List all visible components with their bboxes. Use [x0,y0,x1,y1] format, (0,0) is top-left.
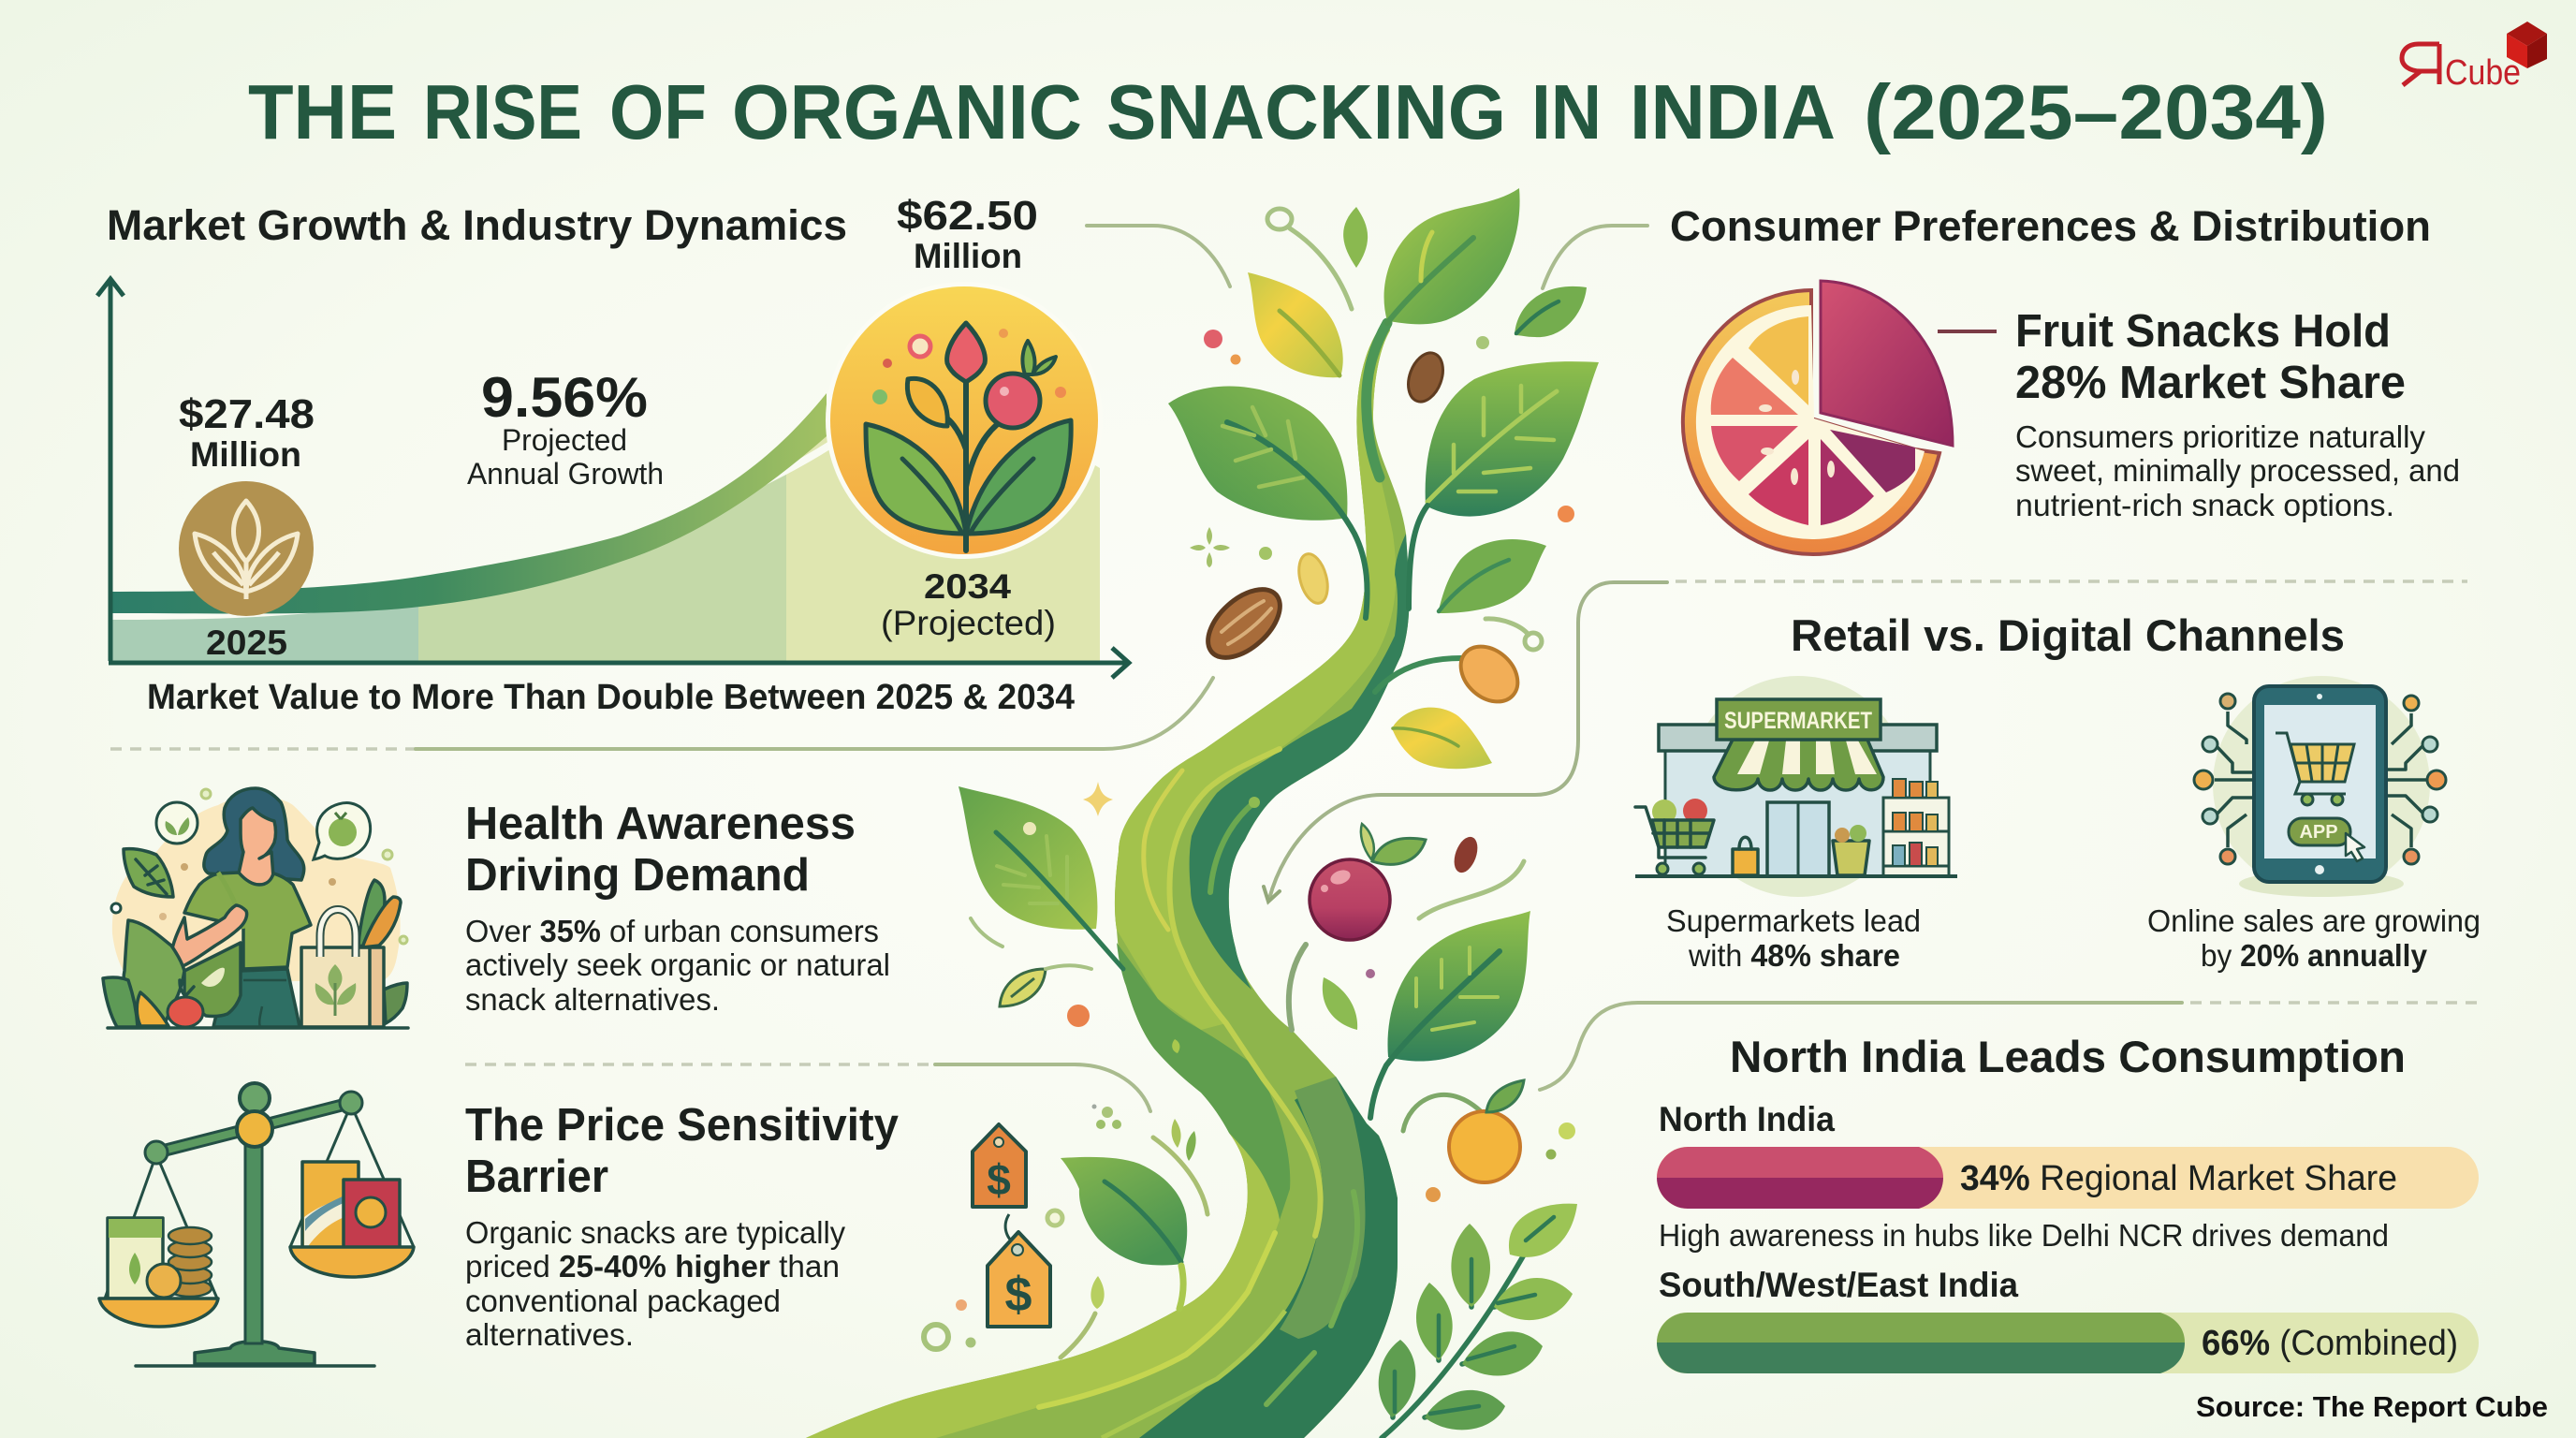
bar: north india 34%: 34% Regional Market Share [1960,1159,2397,1198]
source note: Source: The Report Cube [2196,1390,2548,1423]
text: online sales [2147,903,2481,973]
label: year 2025: 2025 [206,624,287,662]
body: fruit snacks: sweet, minimally processed, and [2015,453,2460,488]
body: price sensitivity: alternatives. [465,1317,634,1352]
text: online sales: Online sales are growing [2147,903,2481,938]
heading: price sensitivity [465,1100,899,1202]
heading: fruit snacks [2015,306,2406,408]
chart caption: Market Value to More Than Double Between 2025 & 2034 [147,678,1075,717]
icon: fruit pie chart [1683,281,1953,554]
title: ORGANIC [732,68,1082,155]
body: fruit snacks: Consumers prioritize naturally [2015,419,2425,454]
body: fruit snacks: nutrient-rich snack options. [2015,488,2394,522]
leaf: yellow lower [1392,708,1492,769]
leaf: small right [1438,539,1546,613]
fruit: plum [1289,824,1524,1030]
marker: 2025 coin [179,481,314,616]
heading: price sensitivity: The Price Sensitivity [465,1100,899,1151]
heading: price sensitivity: Barrier [465,1152,608,1202]
heading: north india leads: North India Leads Consumption [1730,1032,2406,1081]
title: IN [1531,68,1602,155]
heading: health awareness: Health Awareness [465,799,856,849]
lower light sweep [806,1133,1280,1438]
body: fruit snacks [2015,419,2460,522]
label: year 2034 [881,567,1056,642]
heading: market growth: Market Growth & Industry Dynamics [107,201,847,249]
heading: health awareness [465,799,856,901]
leaf: right middle [1409,361,1599,609]
callout line [1938,330,1997,333]
connector lines [110,226,2478,1111]
label: north india: North India [1659,1100,1835,1138]
illustration: central vine [806,188,1599,1438]
bar: other regions 66% [1657,1313,2479,1373]
lower dark base [1139,1077,1398,1438]
panel: market growth chart [97,193,1129,717]
label: growth rate: Projected [502,423,627,457]
leaf: left middle [1168,387,1368,618]
bar: other regions 66%: 66% (Combined) [2202,1324,2458,1363]
chart axes [97,279,1129,678]
panel: consumer preferences [1670,202,2460,554]
title: RISE [423,68,582,155]
logo: RCube [2402,22,2547,93]
icon: price tags: $ [987,1155,1011,1204]
heading: fruit snacks: Fruit Snacks Hold [2015,306,2391,357]
body: health awareness: Over 35% of urban consumers [465,914,879,948]
icon: balance scale [99,1083,414,1366]
panel: retail vs digital [1635,610,2481,973]
icon: tablet with app: APP [2299,822,2338,843]
icon: shopper illustration [103,788,408,1028]
seeds and dots upper [1190,330,1574,712]
label: 2034 value [897,193,1038,275]
icon: supermarket: SUPERMARKET [1724,708,1872,734]
upper light band [1115,318,1396,1030]
text: supermarkets: with 48% share [1688,938,1900,973]
text: awareness note: High awareness in hubs like Delhi NCR drives demand [1659,1218,2389,1253]
body: price sensitivity: priced 25-40% higher than [465,1249,840,1284]
body: price sensitivity [465,1215,845,1352]
leaf: inner lower left and twig [1061,1119,1208,1357]
label: 2034 value: $62.50 [897,193,1038,239]
label: year 2034: 2034 [924,567,1011,606]
icon: supermarket [1635,676,1957,897]
label: 2034 value: Million [914,237,1022,275]
twig: bottom right [1379,1204,1577,1438]
fruit: orange [1403,1080,1575,1202]
growth curve band [110,393,838,616]
bar: north india 34% [1657,1147,2479,1209]
title [248,68,2328,155]
body: price sensitivity: conventional packaged [465,1284,781,1318]
icon: price tags [924,1105,1121,1349]
left darker band [1117,943,1290,1220]
heading: retail vs digital: Retail vs. Digital Channels [1791,610,2345,660]
heading: health awareness: Driving Demand [465,850,810,901]
label: 2025 value [179,391,315,474]
trunk highlight lines [1144,770,1182,930]
leaf: right lower [1370,911,1530,1118]
chart areas [110,393,1100,661]
label: growth rate: Annual Growth [467,457,664,491]
text: supermarkets: Supermarkets lead [1666,903,1921,938]
title: THE [248,68,397,155]
label: growth rate: 9.56% [481,366,648,429]
title: INDIA [1630,68,1836,155]
panel: regional consumption [1657,1032,2479,1373]
heading: consumer preferences: Consumer Preferences & Distribution [1670,202,2431,250]
icon: tablet with app [2194,676,2446,897]
label: south west east india: South/West/East India [1659,1266,2018,1304]
title: OF [609,68,707,155]
leaf: left lower with veins [959,786,1123,969]
label: 2025 value: Million [190,435,301,474]
leaf: top large [1384,188,1520,324]
text: online sales: by 20% annually [2201,938,2428,973]
icon: price tags: $ [1005,1268,1032,1322]
label: year 2034: (Projected) [881,604,1056,642]
heading: fruit snacks: 28% Market Share [2015,358,2406,408]
logo: RCube: Cube [2445,53,2521,93]
leaf: small top and tendril [1267,207,1368,309]
leaf: yellow top [1248,272,1343,377]
body: health awareness [465,914,890,1017]
title: (2025–2034) [1864,68,2328,155]
label: growth rate [467,366,664,491]
panel: health awareness [103,788,890,1028]
small leaf, dot and accents [971,782,1113,1027]
body: price sensitivity: Organic snacks are typically [465,1215,845,1250]
label: 2025 value: $27.48 [179,391,315,437]
vine trunk [806,318,1410,1438]
text: supermarkets [1666,903,1921,973]
body: health awareness: actively seek organic or natural [465,947,890,982]
marker: 2034 flower circle [826,282,1103,559]
title: SNACKING [1106,68,1506,155]
upper dark band [1190,534,1410,990]
body: health awareness: snack alternatives. [465,982,720,1017]
panel: price sensitivity [99,1083,899,1366]
leaf: small top right [1515,286,1587,337]
